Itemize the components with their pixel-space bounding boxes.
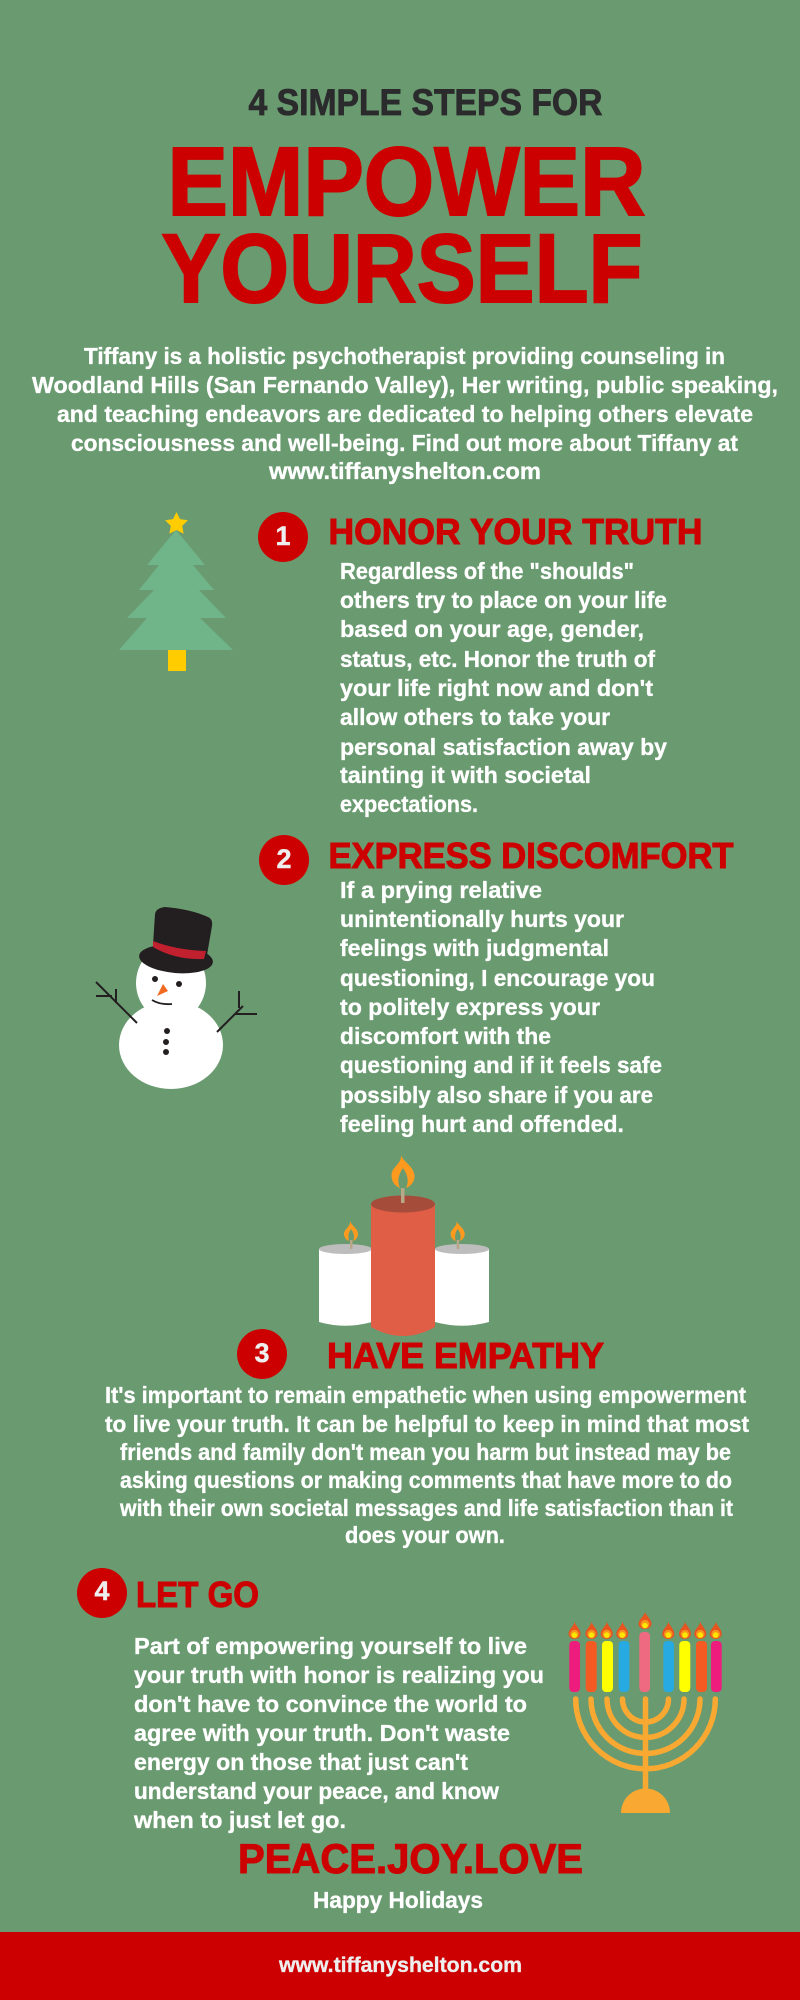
footer website: www.tiffanyshelton.com: [278, 1954, 522, 1977]
step 1 body text: Regardless of the "shoulds": [340, 558, 634, 584]
menorah branches and base: [576, 1699, 715, 1813]
step 1: honor your truth: [258, 511, 702, 817]
step 1 body text: your life right now and don't: [340, 675, 653, 701]
step 3 body text: friends and family don't mean you harm but instead may be: [120, 1439, 731, 1465]
step 3 body text: to live your truth. It can be helpful to keep in mind that most: [105, 1411, 749, 1437]
step 2: express discomfort: [259, 835, 734, 1137]
step 2 body text: questioning and if it feels safe: [340, 1052, 662, 1078]
step 4 number badge: [77, 1568, 127, 1618]
title: empower yourself: EMPOWER: [168, 127, 646, 236]
step 2 body text: If a prying relative: [340, 877, 542, 903]
step 1 number badge: [258, 512, 308, 562]
step 1 body text: expectations.: [340, 791, 478, 817]
step 4 heading: LET GO: [136, 1574, 259, 1615]
step 4 body text: agree with your truth. Don't waste: [134, 1720, 510, 1746]
step 2 body text: discomfort with the: [340, 1023, 551, 1049]
step 3 body text: does your own.: [345, 1522, 505, 1548]
step 2 body text: feeling hurt and offended.: [340, 1111, 624, 1137]
step 3 number badge: [237, 1329, 287, 1379]
step 4 body text: understand your peace, and know: [134, 1778, 499, 1804]
intro text block: and teaching endeavors are dedicated to helping others elevate: [57, 401, 753, 427]
step 4 body text: [133, 1633, 544, 1833]
intro text block: Tiffany is a holistic psychotherapist providing counseling in: [84, 343, 725, 369]
step 1 body text: based on your age, gender,: [340, 616, 644, 642]
intro text block: www.tiffanyshelton.com: [268, 458, 541, 484]
step 2 heading: EXPRESS DISCOMFORT: [328, 835, 734, 876]
icon: candles: [319, 1155, 489, 1336]
step 1 number badge: 1: [275, 521, 291, 551]
closing line: peace joy love: PEACE.JOY.LOVE: [238, 1835, 583, 1882]
step 4 number badge: 4: [94, 1576, 110, 1606]
step 4 body text: energy on those that just can't: [134, 1749, 468, 1775]
footer bar: [0, 1932, 800, 2000]
step 3 heading: HAVE EMPATHY: [327, 1335, 604, 1376]
step 1 body text: others try to place on your life: [340, 587, 667, 613]
step 3 body text: It's important to remain empathetic when using empowerment: [105, 1382, 746, 1408]
step 4 body text: don't have to convince the world to: [134, 1691, 527, 1717]
step 3 body text: with their own societal messages and life satisfaction than it: [119, 1495, 733, 1521]
intro text block: Woodland Hills (San Fernando Valley), Her writing, public speaking,: [32, 372, 778, 398]
step 1 body text: personal satisfaction away by: [340, 734, 667, 760]
icon: snowman: [96, 907, 257, 1089]
step 2 number badge: [259, 835, 309, 885]
step 1 body text: tainting it with societal: [340, 762, 591, 788]
icon: menorah: [568, 1612, 722, 1813]
step 3 body text: [105, 1382, 749, 1548]
title: empower yourself: [162, 127, 646, 323]
step 2 body text: to politely express your: [340, 994, 600, 1020]
step 1 body text: allow others to take your: [340, 704, 610, 730]
closing line: happy holidays: Happy Holidays: [313, 1887, 483, 1913]
step 1 heading: HONOR YOUR TRUTH: [328, 511, 702, 552]
left white candle: [319, 1221, 372, 1326]
step 3 body text: asking questions or making comments that have more to do: [120, 1467, 732, 1493]
step 3: have empathy: [105, 1329, 749, 1548]
step 2 number badge: 2: [276, 844, 292, 874]
step 2 body text: questioning, I encourage you: [340, 965, 655, 991]
step 4 body text: your truth with honor is realizing you: [134, 1662, 544, 1688]
step 2 body text: unintentionally hurts your: [340, 906, 624, 932]
step 1 body text: status, etc. Honor the truth of: [340, 646, 655, 672]
tall red candle: [371, 1155, 435, 1336]
title: empower yourself: YOURSELF: [162, 214, 642, 323]
step 4 body text: when to just let go.: [133, 1807, 346, 1833]
icon: christmas tree: [119, 512, 233, 671]
menorah flames: [568, 1612, 722, 1639]
step 1 body text: [340, 558, 667, 817]
step 3 number badge: 3: [254, 1338, 270, 1368]
step 4 body text: Part of empowering yourself to live: [134, 1633, 527, 1659]
step 2 body text: possibly also share if you are: [340, 1082, 653, 1108]
menorah candles: [569, 1632, 722, 1692]
step 2 body text: feelings with judgmental: [340, 935, 609, 961]
step 4: let go: [77, 1568, 544, 1833]
step 2 body text: [340, 877, 662, 1137]
intro text block: [32, 343, 778, 484]
right white candle: [435, 1221, 489, 1326]
title: 4 simple steps for: 4 SIMPLE STEPS FOR: [248, 82, 602, 123]
intro text block: consciousness and well-being. Find out more about Tiffany at: [71, 430, 738, 456]
